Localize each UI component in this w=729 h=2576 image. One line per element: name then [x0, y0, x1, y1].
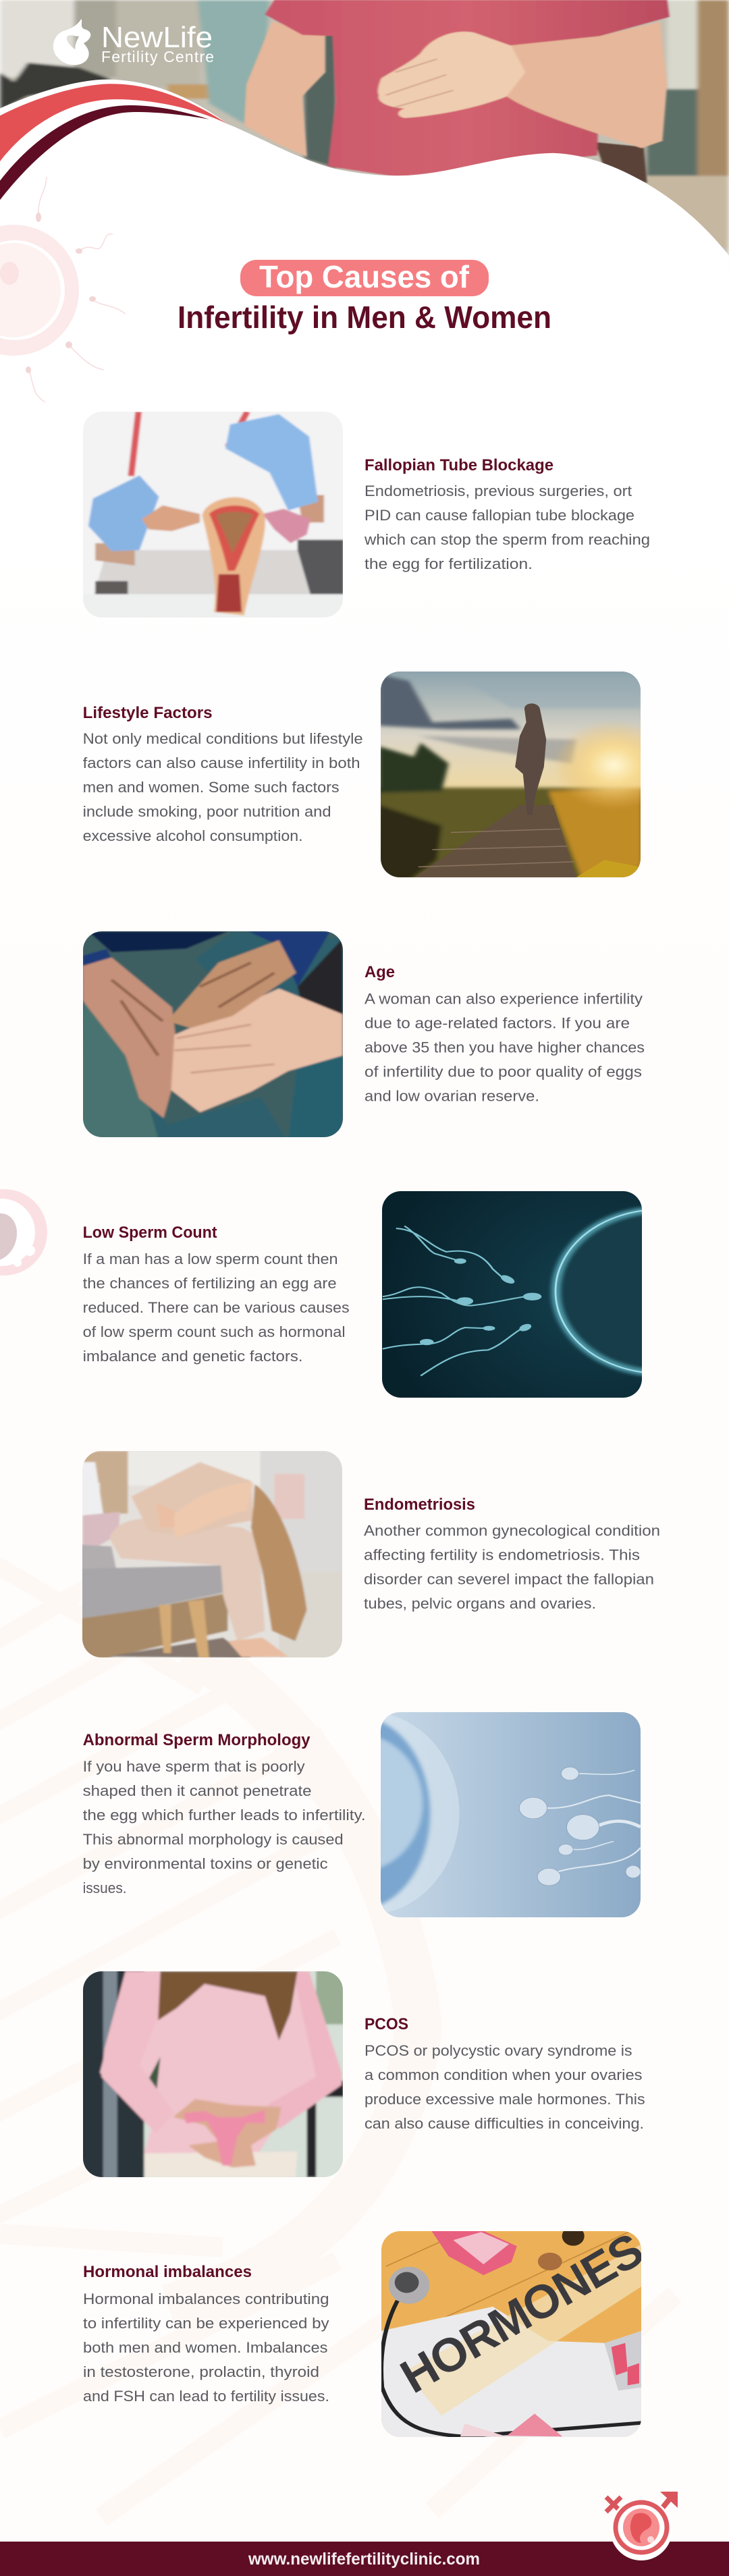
title: Top Causes of: [259, 259, 470, 294]
panel: age: [79, 928, 645, 1142]
photo: gloved hands holding uterus model: [79, 409, 349, 622]
icon: male and female symbol with embryo: [606, 2492, 678, 2560]
text: lifestyle factors: Not only medical conditions but lifestyle: [83, 730, 363, 747]
photo: hormones letter tiles with stethoscope: HORMONES: [392, 2222, 652, 2403]
decorative cell at left edge: [0, 1189, 47, 1276]
text: low sperm count: of low sperm count such as hormonal: [83, 1323, 346, 1340]
footer bar: [0, 2542, 729, 2576]
panel: fallopian tube blockage: [79, 409, 650, 622]
text: pcos: can also cause difficulties in conceiving.: [364, 2115, 644, 2132]
text: endometriosis: Another common gynecological condition: [364, 1523, 660, 1539]
text: lifestyle factors: men and women. Some such factors: [83, 779, 340, 796]
text: endometriosis: affecting fertility is endometriosis. This: [364, 1547, 640, 1563]
text: abnormal sperm morphology: issues.: [83, 1880, 127, 1896]
text: hormonal imbalances: Hormonal imbalances: [83, 2263, 252, 2281]
text: lifestyle factors: factors can also cause infertility in both: [83, 755, 360, 771]
text: hormonal imbalances: to infertility can be experienced by: [83, 2315, 329, 2332]
logo: Fertility Centre: [101, 48, 214, 65]
text: low sperm count: If a man has a low sperm count then: [83, 1251, 338, 1267]
text: abnormal sperm morphology: Abnormal Sperm Morphology: [83, 1731, 310, 1749]
photo: woman doubled over on bench: [79, 1448, 349, 1662]
text: hormonal imbalances: in testosterone, prolactin, thyroid: [83, 2363, 319, 2380]
text: fallopian tube blockage: the egg for fertilization.: [364, 555, 533, 572]
text: fallopian tube blockage: [364, 456, 650, 572]
text: low sperm count: [83, 1224, 350, 1365]
panel: hormonal imbalances: [83, 2222, 652, 2440]
text: lifestyle factors: include smoking, poor nutrition and: [83, 803, 331, 820]
panel: abnormal sperm morphology: [83, 1710, 646, 1920]
logo: NewLife: [101, 21, 213, 54]
panel: low sperm count: [83, 1191, 642, 1398]
white wave: [0, 80, 729, 289]
text: abnormal sperm morphology: the egg which further leads to infertility.: [83, 1807, 366, 1824]
text: fallopian tube blockage: Fallopian Tube Blockage: [364, 456, 554, 474]
text: endometriosis: tubes, pelvic organs and ovaries.: [364, 1595, 596, 1612]
text: fallopian tube blockage: Endometriosis, previous surgeries, ort: [364, 483, 632, 499]
text: age: [364, 963, 645, 1104]
logo: [53, 19, 214, 65]
photo: blue egg and sperm: [381, 1712, 641, 1917]
text: low sperm count: Low Sperm Count: [83, 1224, 217, 1242]
text: age: due to age-related factors. If you are: [364, 1015, 630, 1031]
text: fallopian tube blockage: PID can cause fallopian tube blockage: [364, 507, 634, 524]
text: hormonal imbalances: Hormonal imbalances contributing: [83, 2291, 329, 2307]
text: pcos: a common condition when your ovaries: [364, 2066, 643, 2083]
text: endometriosis: [364, 1496, 660, 1612]
text: pcos: PCOS or polycystic ovary syndrome is: [364, 2042, 632, 2059]
text: age: A woman can also experience infertility: [364, 991, 643, 1007]
panel: endometriosis: [79, 1448, 660, 1662]
panel: pcos: [79, 1968, 645, 2182]
text: fallopian tube blockage: which can stop the sperm from reaching: [364, 531, 650, 548]
hero photo with couple: [0, 0, 729, 289]
text: abnormal sperm morphology: shaped then it cannot penetrate: [83, 1782, 312, 1799]
text: age: of infertility due to poor quality of eggs: [364, 1064, 642, 1080]
text: low sperm count: imbalance and genetic factors.: [83, 1348, 303, 1365]
text: pcos: PCOS: [364, 2015, 408, 2033]
text: age: above 35 then you have higher chances: [364, 1039, 645, 1056]
title pill: [240, 260, 489, 296]
text: pcos: [364, 2015, 645, 2132]
decorative egg cell and sperm: [0, 177, 126, 402]
text: pcos: produce excessive male hormones. This: [364, 2091, 645, 2108]
text: lifestyle factors: [83, 704, 363, 844]
text: abnormal sperm morphology: by environmental toxins or genetic: [83, 1855, 328, 1872]
text: abnormal sperm morphology: [83, 1731, 366, 1896]
text: hormonal imbalances: both men and women. Imbalances: [83, 2339, 328, 2356]
title line two: Infertility in Men & Women: [178, 300, 551, 335]
text: age: and low ovarian reserve.: [364, 1088, 539, 1104]
text: lifestyle factors: excessive alcohol consumption.: [83, 827, 303, 844]
text: abnormal sperm morphology: This abnormal morphology is caused: [83, 1831, 344, 1848]
text: low sperm count: reduced. There can be various causes: [83, 1299, 350, 1316]
photo: woman in pink sweater with uterus graphic: [79, 1968, 349, 2182]
red swoosh: [0, 84, 227, 161]
maroon swoosh: [0, 105, 209, 200]
text: endometriosis: Endometriosis: [364, 1496, 475, 1514]
footer url: www.newlifefertilityclinic.com: [248, 2550, 480, 2569]
text: low sperm count: the chances of fertilizing an egg are: [83, 1275, 337, 1292]
text: endometriosis: disorder can severel impact the fallopian: [364, 1571, 654, 1587]
panel: lifestyle factors: [83, 669, 674, 881]
logo mark: [53, 19, 90, 65]
text: hormonal imbalances: [83, 2263, 329, 2405]
text: lifestyle factors: Lifestyle Factors: [83, 704, 213, 722]
photo: runner at sunset: [381, 672, 641, 877]
text: abnormal sperm morphology: If you have sperm that is poorly: [83, 1758, 305, 1775]
text: hormonal imbalances: and FSH can lead to fertility issues.: [83, 2388, 329, 2405]
photo: sperm approaching egg: [382, 1191, 642, 1398]
text: age: Age: [364, 963, 395, 981]
photo: young hands holding elderly hands: [79, 928, 349, 1142]
title: [178, 259, 551, 335]
